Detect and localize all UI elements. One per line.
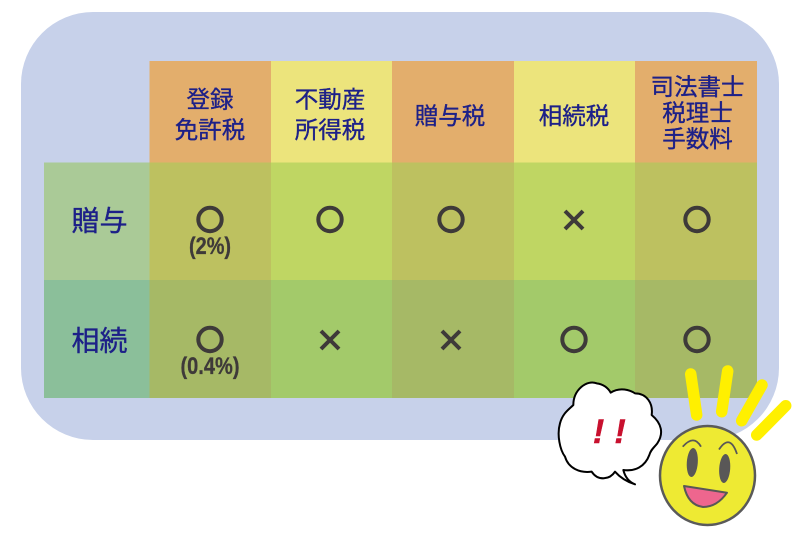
- column header: 相続税: 相続税: [539, 103, 609, 129]
- icon: smiling yellow face with rays: [660, 371, 786, 525]
- cell: 相続 登録免許税 circle 0.4%: [150, 280, 271, 398]
- column header: 司法書士税理士手数料: [635, 61, 757, 162]
- row header: 贈与: [44, 162, 150, 280]
- column header: 登録免許税: [150, 61, 271, 162]
- panel: rounded background: [21, 12, 779, 440]
- cell: 相続 登録免許税 circle 0.4%: (0.4%): [180, 353, 240, 380]
- mouth: [684, 486, 727, 507]
- cell: 相続 相続税 circle: [514, 280, 635, 398]
- cell: 贈与 登録免許税 circle 2%: [150, 162, 271, 280]
- icon: speech bubble with exclamation marks: !: [614, 413, 626, 451]
- column header: 相続税: [514, 61, 635, 162]
- rays: [691, 371, 786, 435]
- column header: 登録免許税: 免許税: [175, 117, 245, 143]
- face: [660, 426, 755, 525]
- column header: 不動産所得税: [271, 61, 392, 162]
- icon: speech bubble with exclamation marks: [559, 382, 661, 484]
- cell: 贈与 贈与税 circle: [392, 162, 514, 280]
- column header: 贈与税: 贈与税: [415, 103, 485, 129]
- row header: 贈与: 贈与: [71, 206, 128, 236]
- row header: 相続: 相続: [71, 326, 128, 356]
- row header: 相続: [44, 280, 150, 398]
- icon: speech bubble with exclamation marks: !: [593, 413, 604, 451]
- column header: 登録免許税: 登録: [186, 86, 234, 112]
- eyes: [686, 448, 699, 477]
- column header: 司法書士税理士手数料: 司法書士: [650, 74, 744, 100]
- cell: 贈与 手数料 circle: [635, 162, 757, 280]
- column header: 不動産所得税: 所得税: [295, 117, 365, 143]
- cell: 相続 手数料 circle: [635, 280, 757, 398]
- cell: 贈与 不動産所得税 circle: [271, 162, 392, 280]
- comparison table: [44, 61, 757, 398]
- eyebrows: [683, 440, 701, 447]
- cell: 相続 贈与税 cross: [392, 280, 514, 398]
- column header: 不動産所得税: 不動産: [295, 86, 365, 112]
- cell: 贈与 相続税 cross: [514, 162, 635, 280]
- column header: 司法書士税理士手数料: 税理士: [662, 100, 733, 126]
- column header: 司法書士税理士手数料: 手数料: [662, 126, 733, 152]
- column header: 贈与税: [392, 61, 514, 162]
- cell: 相続 不動産所得税 cross: [271, 280, 392, 398]
- cell: 贈与 登録免許税 circle 2%: (2%): [189, 233, 231, 260]
